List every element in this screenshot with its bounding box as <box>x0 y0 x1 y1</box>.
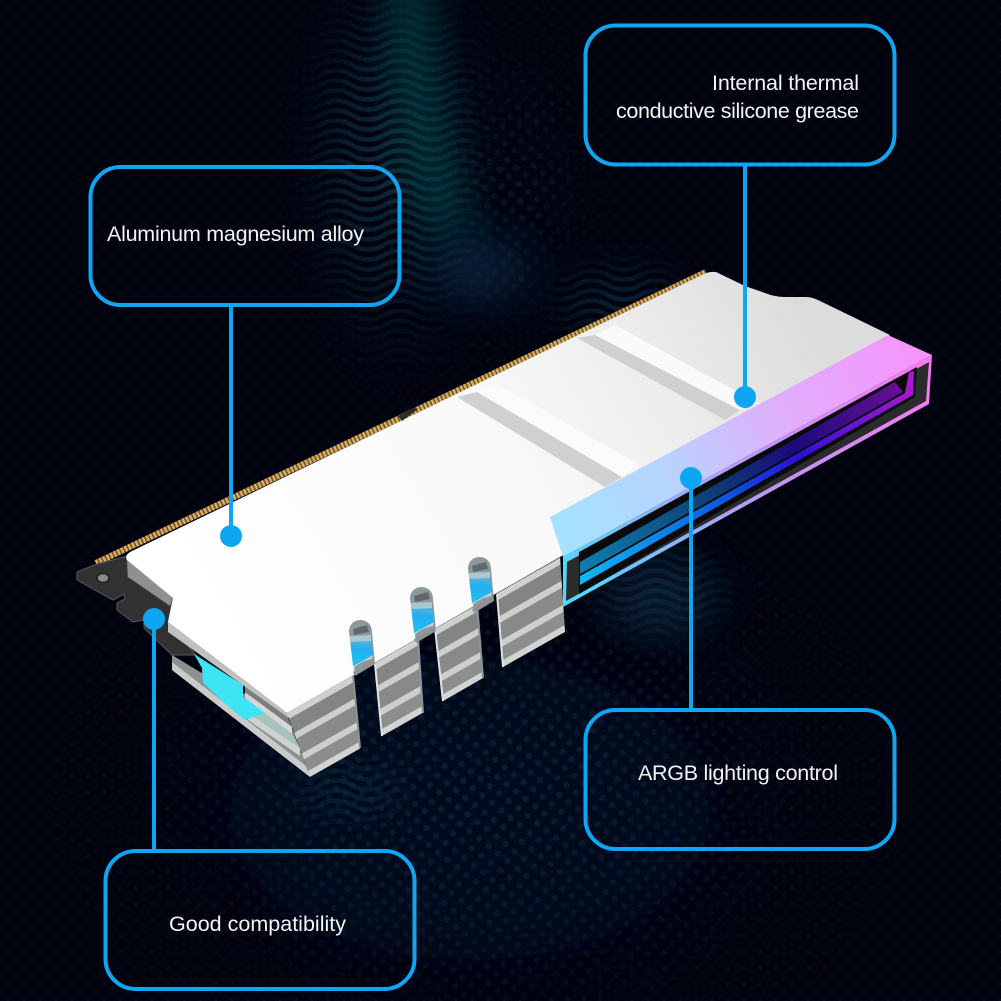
fin slot edges <box>353 594 503 748</box>
gold contact pins <box>96 272 706 563</box>
RAM module heatsink illustration <box>77 272 932 794</box>
cyan light diffuser <box>194 654 265 720</box>
label: conductive silicone grease <box>616 99 859 123</box>
callout: good compatibility <box>106 608 414 989</box>
plate grooves <box>457 325 758 487</box>
callout: thermal silicone grease <box>586 26 894 408</box>
label: ARGB lighting control <box>638 761 838 785</box>
white heatsink top plate <box>126 272 890 713</box>
slots in plate <box>349 557 494 676</box>
leader line and dot <box>734 165 756 408</box>
top plate edge <box>168 622 289 718</box>
callout: aluminum magnesium alloy <box>90 167 400 547</box>
leader line and dot <box>220 305 242 547</box>
heatsink fins <box>287 558 565 777</box>
metal side wall <box>127 556 173 606</box>
label: Aluminum magnesium alloy <box>107 222 364 246</box>
ARGB light bar top <box>550 335 932 557</box>
label <box>616 71 859 123</box>
label: Good compatibility <box>169 912 346 936</box>
PCB end <box>77 556 196 655</box>
callout: ARGB lighting control <box>586 467 894 849</box>
label: Internal thermal <box>712 71 859 95</box>
PCB mounting hole <box>97 574 109 582</box>
leader line and dot <box>143 608 165 850</box>
ARGB light bar front <box>563 355 932 607</box>
fin end profile <box>172 655 310 777</box>
leader line and dot <box>680 467 702 709</box>
memory chip notch <box>398 408 418 421</box>
